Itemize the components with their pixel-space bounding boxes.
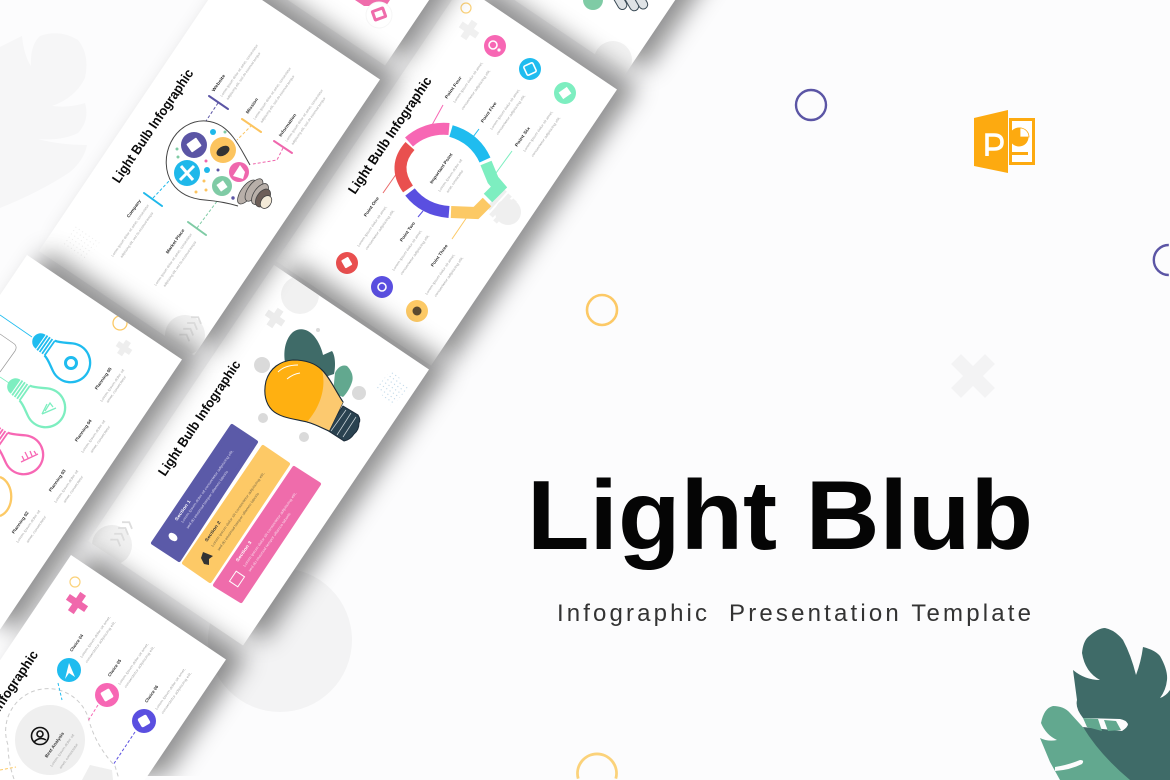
text: planning 02 (11, 509, 48, 544)
text: planning 04: Planning 04 (74, 418, 93, 443)
faint circle (595, 41, 632, 74)
text: point one: Lorem ipsum dolor sit amet, (357, 205, 388, 248)
dot grid (376, 369, 408, 407)
text: information: Lorem ipsum dolor sit amet, consectetur (285, 88, 324, 143)
text: choice 06: Lorem ipsum dolor sit amet, (155, 667, 187, 711)
text: information: adipiscing elit, sed do eiusmod tempor (291, 96, 327, 146)
text: choice 05: Choice 05 (107, 658, 123, 678)
bulb outline (166, 121, 250, 206)
decorative circle purple (796, 90, 826, 120)
marker bars (144, 96, 292, 235)
pink block (355, 0, 390, 6)
green icon (583, 0, 603, 10)
text: point three: Point Three (430, 243, 449, 268)
text: website: Website (211, 73, 227, 93)
text: planning 05 (94, 366, 128, 404)
decorative grey leaf top left (0, 33, 87, 208)
text: important point: amet, consectetur (446, 169, 465, 194)
dark leaf (1073, 628, 1170, 780)
grey bulb base (488, 190, 521, 225)
text: website: Lorem ipsum dolor sit amet, consectetur (220, 43, 259, 98)
icon: PowerPoint (974, 110, 1034, 173)
text: choice 04 (69, 615, 117, 664)
slide: top centre partial (230, 0, 571, 66)
section 1 bar (153, 426, 256, 560)
text: point four: Point Four (444, 75, 463, 100)
slide decoration circle (461, 3, 471, 13)
slide: top right partial (583, 0, 713, 80)
text: choice 06 (144, 667, 193, 715)
text: point two: Lorem ipsum dolor sit amet, (392, 229, 423, 272)
text: point three: Lorem ipsum dolor sit amet, (425, 253, 456, 296)
pink bulb (0, 413, 51, 482)
slide decoration (92, 276, 319, 565)
text: point five: Point Five (480, 101, 498, 124)
subtitle part 2: Presentation Template (729, 600, 1031, 627)
text: choice 05 (107, 642, 156, 689)
green bulb (0, 366, 73, 435)
text: planning 03: Planning 03 (48, 468, 67, 493)
text: company: Company (126, 198, 142, 219)
decorative circle orange (587, 295, 617, 325)
decorative grey circle behind slides (208, 568, 352, 712)
text: important point: Important Point (429, 152, 454, 185)
text: planning 05: Planning 05 (94, 366, 113, 391)
section 3 bar: sed do eiusmod tempor ullamco laboris (248, 512, 292, 573)
table icon (229, 571, 245, 587)
connector lines (383, 105, 512, 239)
section 1 bar: sed do eiusmod tempor ullamco laboris (186, 470, 229, 530)
connectors (153, 103, 283, 228)
text: choice 04: Choice 04 (69, 633, 85, 653)
text: mission: Lorem ipsum dolor sit amet, consectetur (253, 66, 292, 121)
text: point five (480, 88, 526, 136)
text: planning 02: amet, consectetur (26, 514, 48, 544)
text: point two: Point Two (399, 221, 416, 243)
text: website: adipiscing elit, sed do eiusmod tempor (226, 51, 262, 101)
text: important point: Lorem ipsum dolor sit (438, 158, 463, 193)
text: point two: consectetur adipiscing elit, (400, 234, 430, 276)
ring segments (400, 129, 499, 213)
text: point one (357, 195, 395, 251)
text: planning 05: Lorem ipsum dolor sit (100, 368, 125, 403)
text: choice 06: Choice 06 (144, 684, 160, 704)
leaf slit stripes (1083, 718, 1121, 731)
text: point four (444, 61, 491, 111)
text: best analysis: amet, consectetur (59, 742, 80, 770)
text: planning 02: Planning 02 (11, 510, 30, 535)
slide: ring light bulb (276, 0, 617, 366)
text: point six: Lorem ipsum dolor sit amet, (523, 110, 554, 153)
grey plus (455, 16, 483, 44)
wires and box (0, 315, 32, 383)
text: point four: consectetur adipiscing elit, (461, 69, 491, 111)
section 3 bar: Section 3 (235, 539, 253, 563)
title: Light Bulb Infographic (109, 66, 197, 186)
section 3 bar: Lorem ipsum dolor sit consectetur adipiscing elit, (243, 492, 297, 568)
text: choice 04: Lorem ipsum dolor sit amet, (80, 615, 112, 659)
text: planning 03 (48, 468, 85, 504)
point icons (336, 35, 576, 322)
text: best analysis (44, 731, 80, 770)
connectors (0, 683, 135, 770)
decorative grey x (939, 342, 1007, 410)
orange bulb (265, 360, 360, 441)
text: planning 05: amet, consectetur (106, 374, 128, 404)
bulb base fragment (609, 0, 649, 12)
text: market place: adipiscing elit, sed do eiusmod tempor (163, 240, 198, 288)
text: planning 03: Lorem ipsum dolor sit (54, 469, 79, 504)
text: point one: consectetur adipiscing elit, (365, 209, 395, 251)
pink plus (62, 588, 92, 618)
light leaf slit (1055, 760, 1083, 771)
blue bulb (23, 321, 98, 390)
text: choice 04: consectetur adipiscing elit, (85, 620, 117, 664)
main title: Light Blub (527, 460, 1033, 570)
slide: light bulb with circles (39, 0, 380, 356)
grey bulb (6, 689, 119, 780)
text: point six (514, 110, 561, 158)
icon circles (174, 132, 249, 196)
section 1 bar: Lorem ipsum dolor sit consectetur adipiscing elit, (181, 449, 234, 524)
slide decoration circle (70, 577, 80, 587)
pink bulb icon (21, 451, 38, 462)
bulb screw base (234, 176, 274, 211)
decorative circle right edge (1154, 245, 1169, 275)
text: company: adipiscing elit, sed do eiusmod tempor (120, 211, 155, 259)
decorative circle bottom (578, 754, 616, 779)
text: point four: Lorem ipsum dolor sit amet, (453, 61, 484, 104)
leaves bottom right (1040, 628, 1170, 780)
blue bulb icon (66, 358, 76, 368)
slide: best analysis choices (0, 555, 226, 780)
text: choice 05: Lorem ipsum dolor sit amet, (118, 642, 150, 686)
light leaf (1040, 706, 1135, 780)
text: point six: Point Six (514, 125, 531, 148)
text: market place: Lorem ipsum dolor sit amet, consectetur (154, 232, 193, 287)
analysis icon (32, 728, 48, 744)
text: best analysis: Lorem ipsum dolor sit (50, 733, 75, 768)
text: point five: consectetur adipiscing elit, (496, 94, 526, 136)
text: best analysis: Best Analysis (44, 731, 65, 759)
yellow bulb (0, 477, 11, 516)
text: mission: adipiscing elit, sed do eiusmod tempor (260, 74, 296, 124)
small dots (176, 129, 235, 200)
text: planning 02: Lorem ipsum dolor sit (16, 509, 41, 544)
section 3 bar (215, 468, 319, 601)
text: point three (425, 243, 464, 298)
mic icon (167, 531, 179, 543)
text: planning 04: amet, consectetur (90, 424, 112, 454)
text: point one: Point One (363, 195, 380, 218)
subtitle part 1: Infographic (557, 600, 707, 627)
text: information: Information (278, 112, 298, 138)
text: point six: consectetur adipiscing elit, (531, 116, 561, 158)
pin icon (201, 552, 213, 565)
text: planning 04 (74, 418, 112, 454)
text: point three: consectetur adipiscing elit, (434, 256, 464, 298)
title: Light Bulb Infographic (345, 73, 435, 197)
slide decoration (60, 225, 205, 355)
icon badge (366, 2, 392, 28)
text: choice 05: consectetur adipiscing elit, (124, 645, 156, 689)
text: point two (392, 221, 430, 276)
section 2 bar: sed do eiusmod tempor ullamco laboris (217, 492, 260, 552)
choice icons (57, 658, 156, 733)
section 1 bar: Section 1 (174, 498, 192, 522)
grey circles (254, 328, 366, 442)
text: mission: Mission (245, 97, 259, 115)
section 2 bar: Section 2 (204, 519, 222, 543)
leaves (284, 329, 353, 397)
slide: four outlined bulbs (0, 255, 182, 636)
slide decoration (112, 316, 132, 356)
section 2 bar (184, 447, 288, 581)
title: Light Bulb Infographic (155, 357, 244, 479)
text: important point (429, 152, 465, 194)
text: point five: Lorem ipsum dolor sit amet, (490, 88, 521, 131)
text: market place: Market Place (165, 227, 186, 255)
text: company: Lorem ipsum dolor sit amet, consectetur (111, 203, 150, 258)
section 2 bar: Lorem ipsum dolor sit consectetur adipiscing elit, (211, 472, 265, 548)
text: choice 06: consectetur adipiscing elit, (161, 671, 193, 715)
green bulb icon (42, 403, 56, 414)
text: planning 04: Lorem ipsum dolor sit (81, 419, 106, 454)
text: planning 03: amet, consectetur (63, 474, 85, 504)
slide: centre orange bulb (88, 265, 429, 646)
